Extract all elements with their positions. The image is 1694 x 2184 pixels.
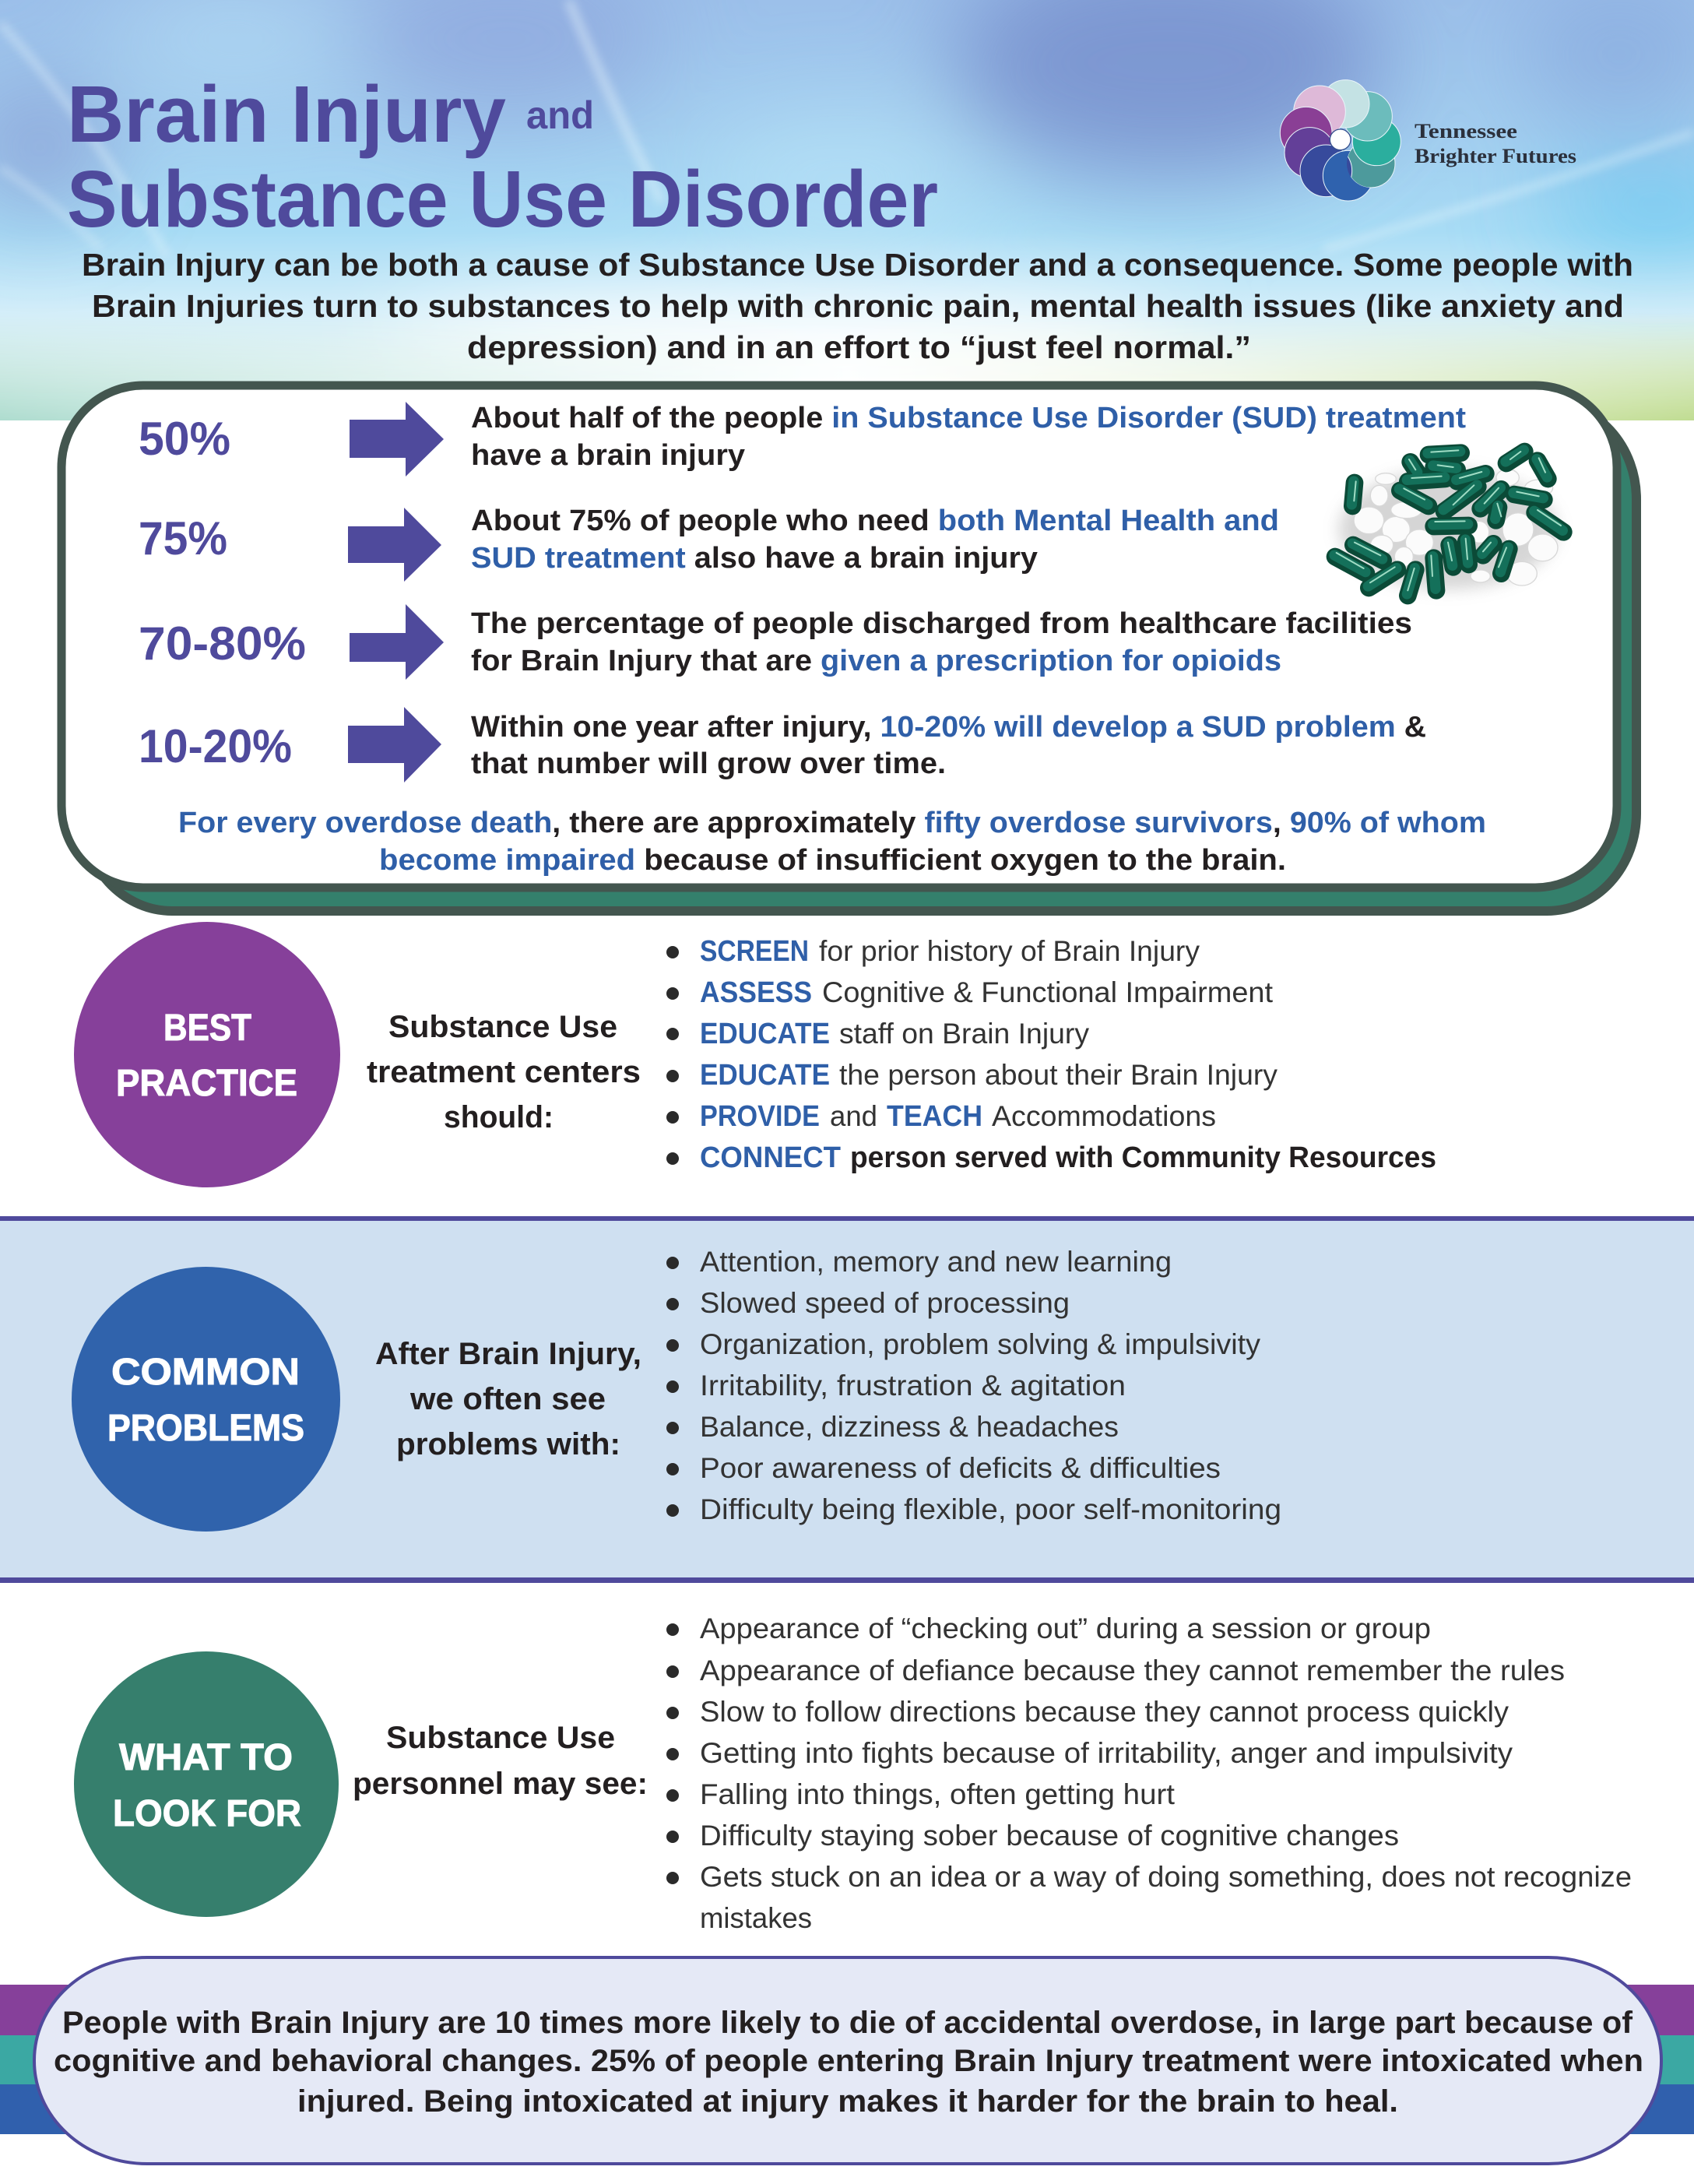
section: best practice — [74, 922, 1436, 1187]
list: best practice: staff on Brain Injury — [839, 1018, 1089, 1050]
list: best practice: the person about their Brain Injury — [839, 1059, 1278, 1091]
list: best practice — [666, 935, 1436, 1174]
intro text: depression) and in an effort to “just feel normal.” — [467, 329, 1251, 365]
stat row: 75%: SUD treatment also have a brain injury — [471, 542, 1038, 575]
callout text — [54, 2006, 1643, 2119]
callout text: People with Brain Injury are 10 times more likely to die of accidental overdose, in large part because of — [62, 2006, 1633, 2040]
callout text: injured. Being intoxicated at injury makes it harder for the brain to heal. — [297, 2084, 1398, 2119]
lead-in text — [367, 1010, 641, 1134]
list: what to look for: Getting into fights because of irritability, anger and impulsivity — [700, 1737, 1513, 1769]
stat row: 70-80% — [139, 604, 1412, 680]
list: what to look for: Falling into things, often getting hurt — [700, 1778, 1176, 1810]
badge: what to look for — [74, 1651, 339, 1917]
colour stripes — [0, 1985, 1694, 2134]
stat row: 70-80%: 70-80% — [139, 617, 306, 670]
intro text — [82, 247, 1633, 365]
callout pill — [34, 1957, 1661, 2164]
list: common problems: Poor awareness of deficits & difficulties — [700, 1452, 1221, 1484]
stat row: 10-20%: Within one year after injury, 10-20% will develop a SUD problem & — [471, 711, 1426, 744]
stat row: 75% — [139, 505, 1279, 582]
list: best practice: TEACH — [887, 1100, 982, 1133]
title — [67, 69, 938, 244]
lead-in text: we often see — [409, 1382, 606, 1416]
band background — [0, 1216, 1694, 1583]
stat row: 50% — [139, 402, 1466, 477]
panel card — [62, 385, 1617, 888]
badge: best practice — [74, 922, 340, 1187]
arrow — [350, 604, 444, 680]
stat row: 10-20%: 10-20% — [139, 720, 292, 772]
list: best practice: ASSESS — [700, 976, 812, 1009]
list: what to look for: Appearance of defiance because they cannot remember the rules — [700, 1655, 1565, 1686]
overdose note: become impaired because of insufficient oxygen to the brain. — [379, 844, 1286, 877]
list: common problems: Organization, problem solving & impulsivity — [700, 1328, 1260, 1360]
stat row: 10-20%: that number will grow over time. — [471, 747, 946, 780]
list: best practice: person served with Community Resources — [850, 1141, 1436, 1174]
title: and — [526, 93, 594, 137]
arrow — [348, 707, 441, 783]
stat row: 75%: 75% — [139, 512, 227, 564]
lead-in text — [375, 1337, 641, 1461]
badge: best practice: PRACTICE — [116, 1063, 297, 1104]
list: best practice: PROVIDE — [700, 1100, 820, 1133]
list: common problems — [666, 1246, 1281, 1525]
list: common problems: Attention, memory and new learning — [700, 1246, 1172, 1278]
section: common problems — [0, 1216, 1694, 1583]
badge: what to look for: LOOK FOR — [113, 1793, 301, 1834]
list: what to look for: Slow to follow directions because they cannot process quickly — [700, 1696, 1509, 1728]
list: what to look for: mistakes — [700, 1902, 812, 1934]
list: best practice: EDUCATE — [700, 1018, 830, 1050]
overdose note: For every overdose death , there are approximately fifty overdose survivors , 90% of whom — [178, 807, 1486, 839]
list: what to look for: Gets stuck on an idea or a way of doing something, does not recognize — [700, 1861, 1632, 1893]
stat row: 50%: have a brain injury — [471, 439, 745, 472]
list: best practice: Cognitive & Functional Impairment — [822, 976, 1274, 1008]
list: common problems: Balance, dizziness & headaches — [700, 1411, 1119, 1443]
badge: best practice: BEST — [163, 1008, 251, 1049]
section: what to look for — [74, 1613, 1632, 1934]
list: best practice: SCREEN — [700, 935, 809, 968]
icon: logo flower — [1280, 80, 1401, 201]
stat row: 70-80%: for Brain Injury that are given a prescription for opioids — [471, 645, 1281, 677]
panel shadow — [83, 402, 1636, 911]
list: best practice: EDUCATE — [700, 1059, 830, 1092]
arrow — [350, 402, 444, 477]
list: common problems: Irritability, frustration & agitation — [700, 1370, 1126, 1401]
callout text: cognitive and behavioral changes. 25% of people entering Brain Injury treatment were intoxicated when — [54, 2044, 1643, 2078]
lead-in text: After Brain Injury, — [375, 1337, 641, 1371]
lead-in text — [353, 1721, 648, 1801]
badge: common problems: COMMON — [111, 1352, 300, 1393]
stat row: 70-80%: The percentage of people discharged from healthcare facilities — [471, 607, 1412, 640]
list: best practice: Accommodations — [992, 1100, 1216, 1132]
list: what to look for — [666, 1613, 1632, 1934]
list: common problems: Difficulty being flexible, poor self-monitoring — [700, 1493, 1281, 1525]
overdose note — [178, 807, 1486, 877]
lead-in text: Substance Use — [386, 1721, 615, 1755]
image: pile of pills — [1334, 450, 1563, 596]
title: Substance Use Disorder — [67, 154, 938, 244]
panel: statistics — [62, 385, 1636, 911]
logo: Tennessee Brighter Futures: Brighter Futures — [1415, 145, 1576, 167]
intro text: Brain Injury can be both a cause of Substance Use Disorder and a consequence. Some people with — [82, 247, 1633, 283]
stat row: 75%: About 75% of people who need both Mental Health and — [471, 505, 1279, 537]
title: Brain Injury — [67, 69, 506, 159]
list: what to look for: Appearance of “checking out” during a session or group — [700, 1613, 1431, 1644]
list: best practice: CONNECT — [700, 1141, 841, 1174]
arrow — [348, 508, 441, 582]
lead-in text: Substance Use — [388, 1010, 617, 1044]
lead-in text: should: — [444, 1100, 554, 1134]
stat row: 50%: About half of the people in Substance Use Disorder (SUD) treatment — [471, 402, 1466, 434]
badge: common problems: PROBLEMS — [107, 1408, 304, 1449]
lead-in text: problems with: — [396, 1427, 620, 1461]
list: best practice: for prior history of Brain Injury — [819, 935, 1200, 967]
list: what to look for: Difficulty staying sober because of cognitive changes — [700, 1820, 1399, 1852]
header sky background — [0, 0, 1694, 420]
lead-in text: personnel may see: — [353, 1767, 648, 1801]
stat row: 10-20% — [139, 707, 1426, 783]
badge: what to look for: WHAT TO — [119, 1737, 293, 1778]
lead-in text: treatment centers — [367, 1055, 641, 1089]
footer callout — [0, 1957, 1694, 2164]
list: common problems: Slowed speed of processing — [700, 1287, 1070, 1319]
intro text: Brain Injuries turn to substances to help with chronic pain, mental health issues (like anxiety and — [92, 288, 1624, 324]
stat row: 50%: 50% — [139, 413, 230, 465]
list: best practice: and — [830, 1100, 877, 1132]
badge: common problems — [72, 1267, 340, 1532]
logo: Tennessee Brighter Futures: Tennessee — [1415, 120, 1517, 142]
logo: Tennessee Brighter Futures — [1280, 80, 1576, 201]
